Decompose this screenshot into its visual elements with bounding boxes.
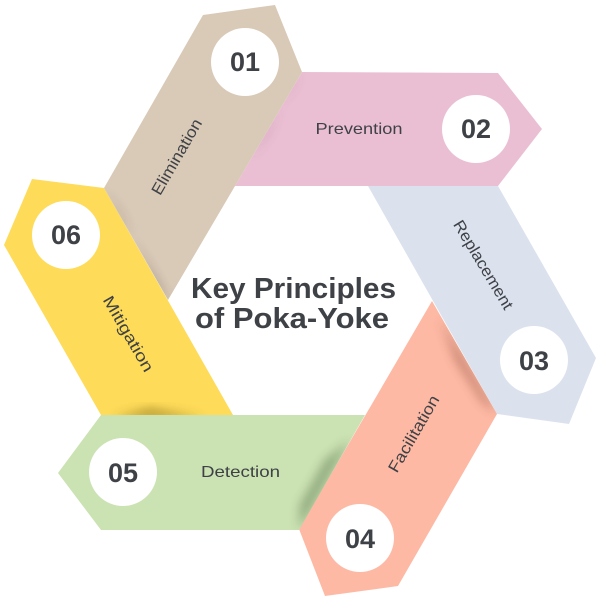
panel: 06 Mitigation [4, 179, 233, 418]
panel: 04 Facilitation [299, 301, 497, 596]
number circle 03 [500, 326, 568, 394]
number circle 05 [89, 438, 157, 506]
panel: 01 Elimination [104, 5, 302, 306]
number circle 02 [442, 95, 510, 163]
number 01: 01 [230, 47, 260, 77]
number 05: 05 [108, 458, 138, 488]
label Facilitation: Facilitation [386, 393, 443, 476]
number circle 06 [32, 201, 100, 269]
label Mitigation: Mitigation [99, 293, 156, 375]
number circle 01 [211, 28, 279, 96]
number 02: 02 [461, 114, 491, 144]
panel: 03 Replacement [368, 186, 596, 424]
number 03: 03 [519, 346, 549, 376]
panel: 02 Prevention [235, 72, 542, 186]
title: of Poka-Yoke [195, 303, 389, 335]
number 06: 06 [51, 220, 81, 250]
title: Key Principles [191, 273, 396, 305]
number 04: 04 [345, 524, 375, 554]
label Elimination: Elimination [149, 116, 206, 198]
label Prevention: Prevention [316, 121, 402, 138]
title [191, 273, 396, 335]
label Replacement: Replacement [449, 218, 516, 313]
panel: 05 Detection [58, 415, 365, 530]
number circle 04 [326, 504, 394, 572]
label Detection: Detection [201, 464, 280, 481]
